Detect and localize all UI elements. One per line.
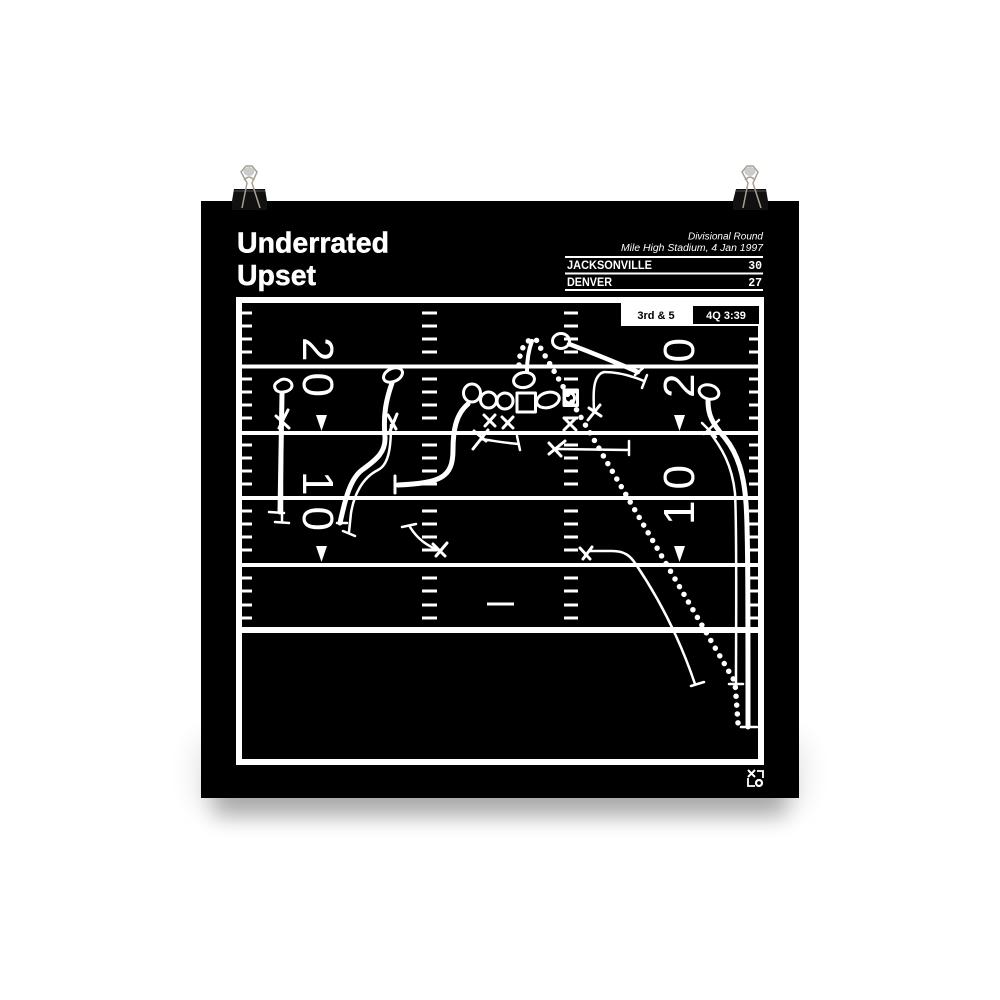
- yard numbers right: 0: [655, 465, 704, 490]
- dotted pass path: [519, 339, 738, 723]
- situation tab: [621, 303, 759, 326]
- defender route to middle: [473, 430, 520, 450]
- title: Underrated: [237, 228, 389, 260]
- slot receiver route: [337, 365, 405, 536]
- yard numbers right: 2: [655, 374, 704, 398]
- right receiver route: [698, 383, 757, 727]
- title: Upset: [237, 260, 316, 292]
- poster drop shadow: [214, 775, 786, 817]
- title: [237, 228, 389, 292]
- scoreboard: 30: [748, 260, 762, 273]
- yard numbers left: 0: [293, 372, 342, 397]
- game info text: Divisional Round: [688, 232, 763, 242]
- game info text: Mile High Stadium, 4 Jan 1997: [621, 243, 763, 254]
- scoreboard: DENVER: [567, 277, 613, 289]
- icon: right binder clip: [733, 166, 768, 210]
- yard triangles: [316, 415, 685, 562]
- quarterback: [512, 341, 536, 389]
- top receiver route: [552, 334, 643, 375]
- crossing defender route: [588, 372, 647, 420]
- defenders at the line: [484, 415, 576, 430]
- situation tab: 4Q 3:39: [706, 310, 746, 322]
- hash marks: [242, 313, 758, 618]
- field border: [239, 300, 761, 762]
- yard numbers right: [655, 338, 704, 525]
- yard lines: [242, 364, 758, 633]
- yard numbers left: 2: [293, 337, 342, 361]
- offensive line: [464, 384, 578, 412]
- play diagram: [269, 334, 757, 727]
- yard numbers right: 1: [655, 501, 704, 525]
- scoreboard: JACKSONVILLE: [567, 260, 652, 272]
- deep defender route: [580, 547, 704, 686]
- icon: brand logo: [748, 770, 763, 786]
- icon: left binder clip: [232, 166, 267, 210]
- left receiver route: [269, 379, 292, 523]
- poster side shadow: [196, 740, 804, 805]
- yard numbers left: 0: [293, 506, 342, 531]
- yard numbers left: [293, 337, 342, 531]
- football field: [239, 300, 761, 762]
- flat defender route: [402, 524, 447, 556]
- yard numbers right: 0: [655, 338, 704, 362]
- game info text: [621, 232, 763, 254]
- scoreboard: 27: [748, 277, 762, 290]
- defender route across: [549, 441, 629, 456]
- inside receiver route: [395, 404, 468, 493]
- poster background: [201, 201, 799, 798]
- yard numbers left: 1: [293, 471, 342, 495]
- scoreboard: [565, 256, 763, 291]
- situation tab: 3rd & 5: [637, 310, 675, 322]
